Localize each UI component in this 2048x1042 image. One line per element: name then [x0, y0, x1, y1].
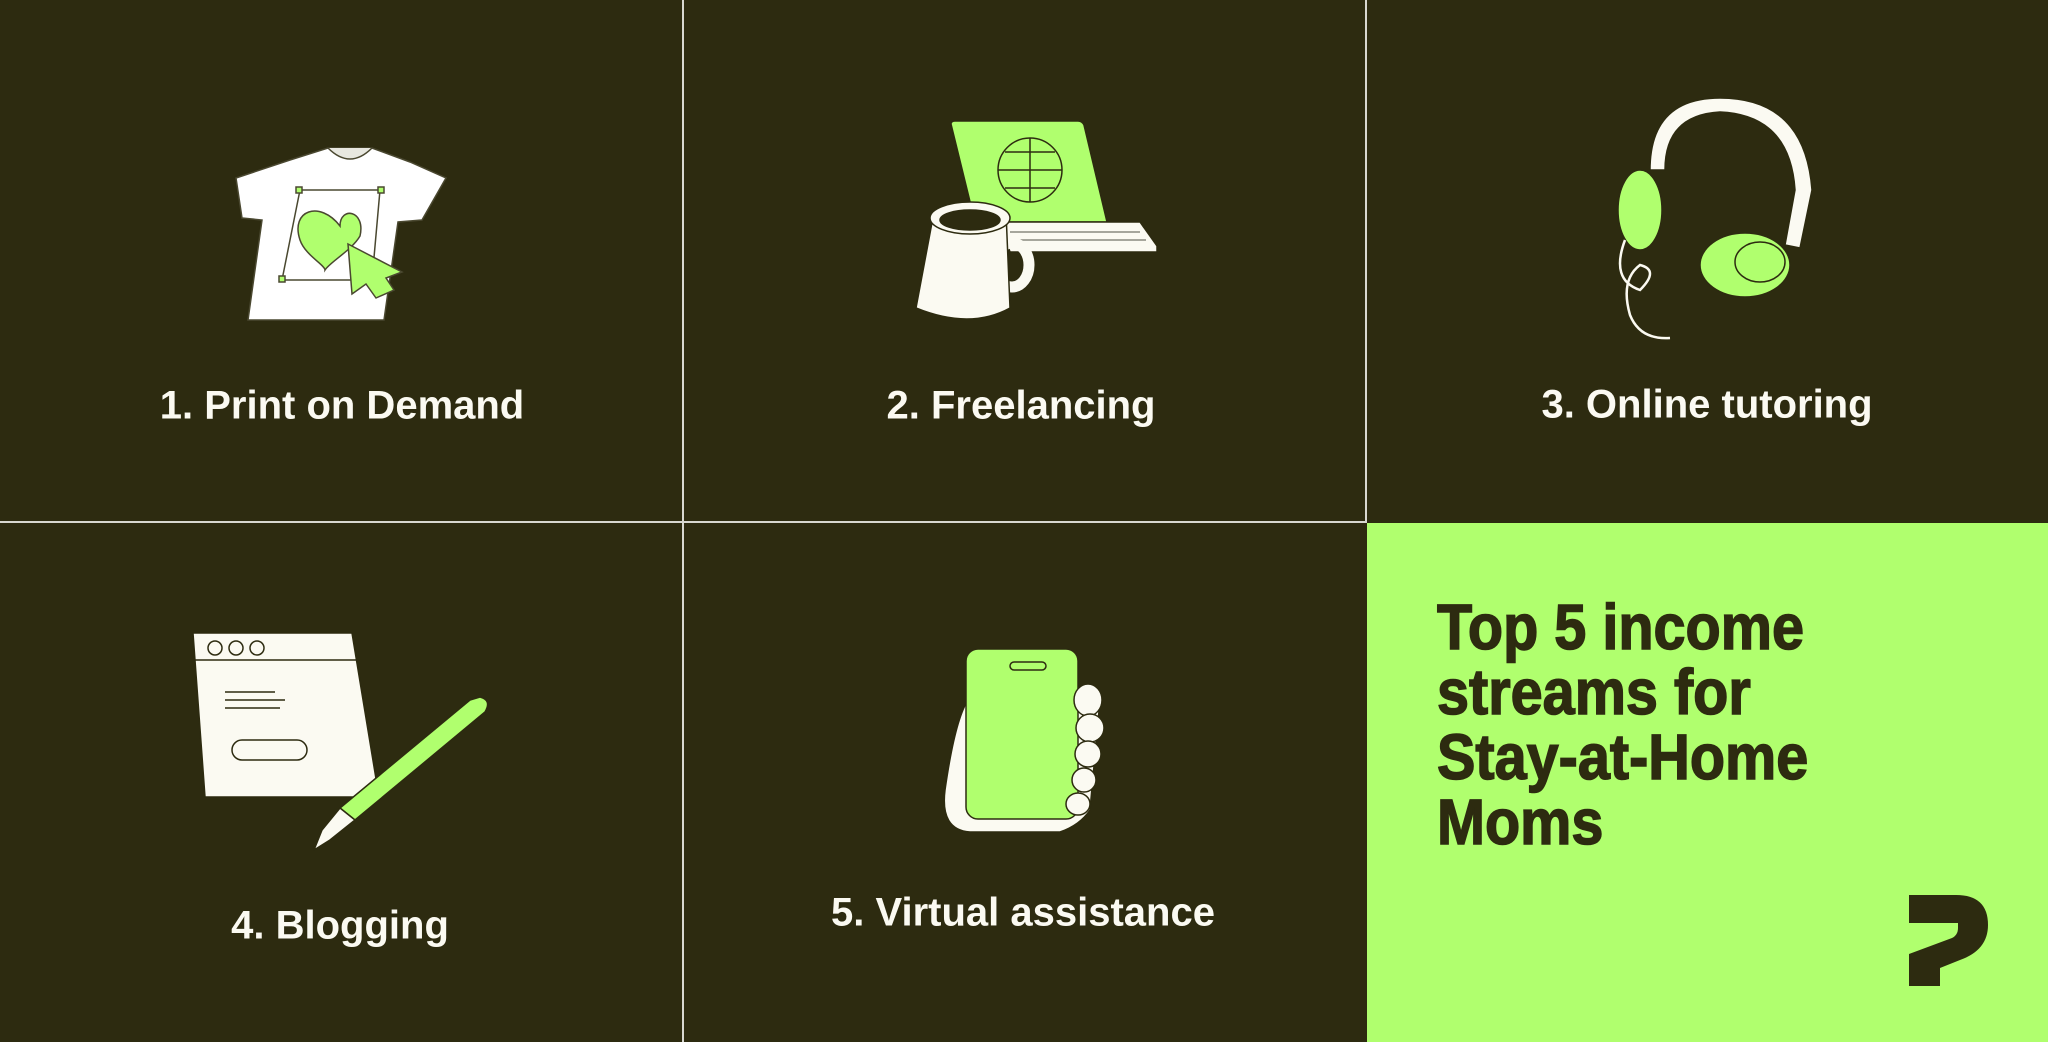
title — [1436, 591, 1808, 858]
icon: t-shirt — [236, 148, 446, 320]
title: Top 5 income — [1437, 591, 1804, 663]
title: Moms — [1437, 786, 1603, 858]
label 2: 2. Freelancing — [887, 384, 1155, 428]
panel: title card — [1367, 523, 2048, 1042]
icon: phone in hand — [944, 649, 1104, 832]
title: Stay-at-Home — [1437, 721, 1808, 793]
label 1: 1. Print on Demand — [160, 384, 524, 428]
label 3: 3. Online tutoring — [1541, 382, 1873, 426]
icon: headphones — [1618, 98, 1812, 338]
label 5: 5. Virtual assistance — [831, 890, 1215, 934]
icon: blog page and pen — [193, 633, 488, 850]
label 4: 4. Blogging — [231, 904, 449, 948]
icon: laptop and mug — [916, 121, 1157, 319]
logo — [1909, 895, 1988, 986]
title: streams for — [1437, 656, 1751, 728]
